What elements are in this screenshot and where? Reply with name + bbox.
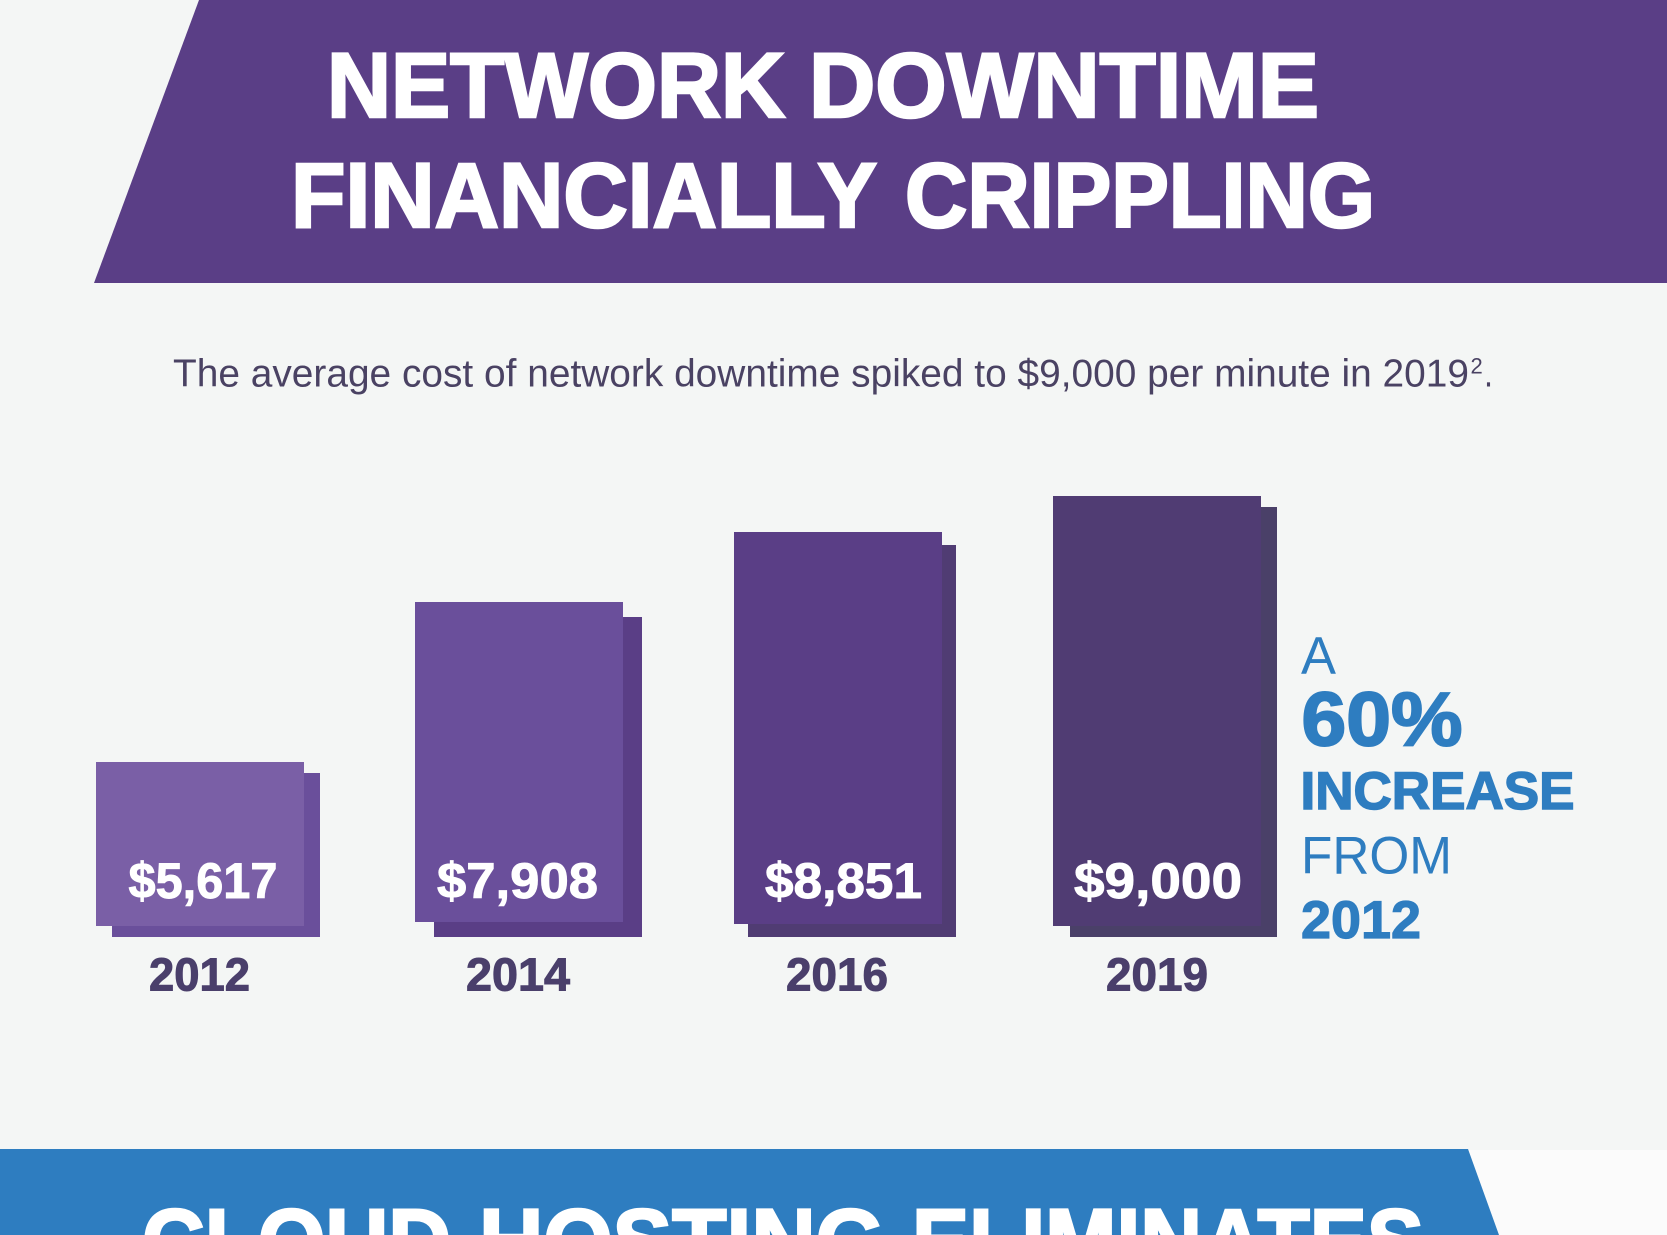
bar: 2019: 2019 xyxy=(1106,948,1208,1000)
callout: 60% increase xyxy=(1300,627,1574,950)
title text xyxy=(291,35,1375,247)
title banner xyxy=(94,0,1667,283)
bar: 2016 xyxy=(734,532,956,1000)
next section heading xyxy=(142,1191,1424,1235)
next section banner xyxy=(0,1149,1499,1235)
bar: 2019: $9,000 xyxy=(1074,853,1242,909)
callout: 60% increase: 2012 xyxy=(1301,891,1421,950)
bar: 2019 xyxy=(1053,496,1277,1000)
title text: DOWNTIME xyxy=(809,35,1319,137)
bar: 2012: 2012 xyxy=(149,948,250,1000)
subtitle: . xyxy=(1484,353,1493,396)
bar: 2012: $5,617 xyxy=(128,853,278,909)
callout: 60% increase: A xyxy=(1301,627,1337,686)
subtitle: The average cost of network downtime spiked to $9,000 per minute in 2019 xyxy=(173,353,1469,396)
title text: NETWORK xyxy=(327,35,785,137)
bar: 2016: 2016 xyxy=(786,948,888,1000)
callout: 60% increase: INCREASE xyxy=(1300,762,1574,821)
bar: 2016: $8,851 xyxy=(765,853,922,909)
callout: 60% increase: FROM xyxy=(1301,827,1452,886)
bar: 2014: 2014 xyxy=(466,948,570,1000)
bar chart xyxy=(96,496,1277,1000)
bar: 2014: $7,908 xyxy=(437,853,598,909)
title text: FINANCIALLY xyxy=(291,145,877,247)
bar: 2012 xyxy=(96,762,320,1000)
bar: 2014 xyxy=(415,602,642,1000)
callout: 60% increase: 60% xyxy=(1302,678,1462,762)
subtitle: 2 xyxy=(1470,354,1483,378)
title text: CRIPPLING xyxy=(905,145,1375,247)
